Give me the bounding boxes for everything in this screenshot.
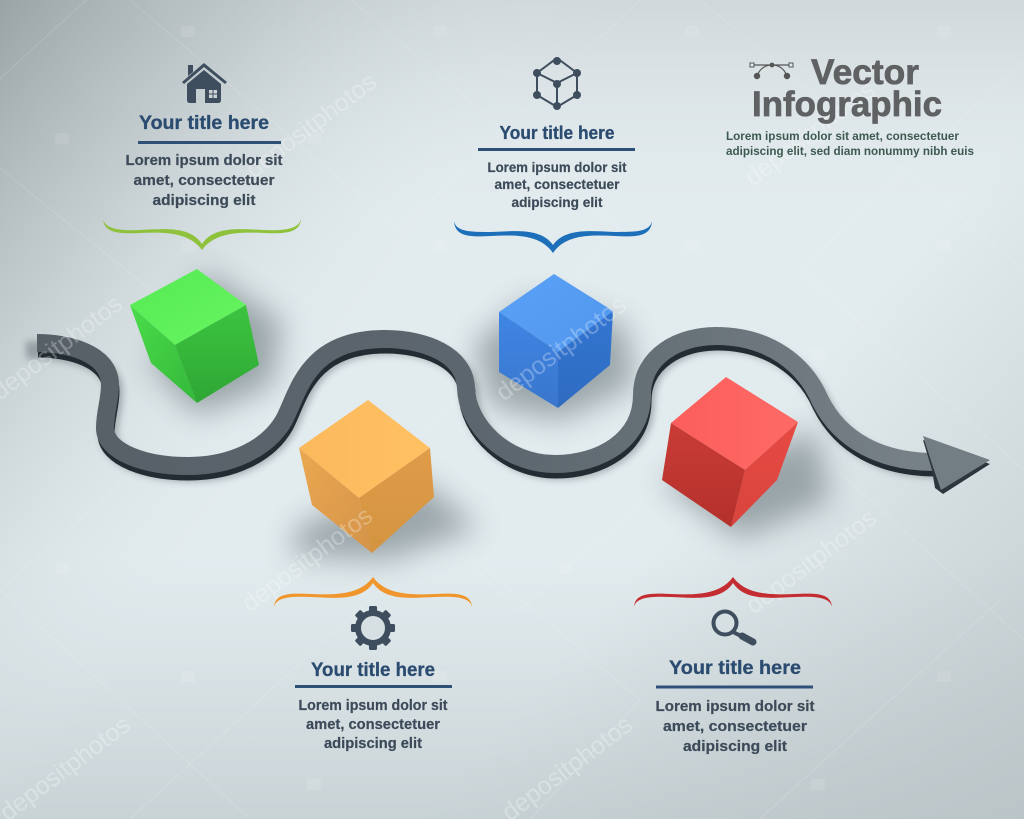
subheading: Lorem ipsum dolor sit amet, consectetuer (726, 129, 959, 143)
text block: adipiscing elit (512, 195, 603, 210)
cube: green (130, 269, 259, 403)
heading: Infographic (752, 85, 942, 124)
watermark text: depositphotos (491, 291, 632, 407)
text block: Lorem ipsum dolor sit (488, 160, 627, 175)
text block: amet, consectetuer (663, 719, 807, 735)
text block (656, 699, 815, 755)
text block (298, 698, 448, 752)
brace: blue (454, 221, 652, 253)
watermark text: depositphotos (741, 504, 882, 620)
watermark text: depositphotos (237, 502, 378, 618)
rule (656, 686, 813, 688)
icon: magnifier (714, 612, 753, 642)
text block (126, 153, 283, 209)
cube: orange (299, 400, 434, 553)
title: Your title here (139, 112, 269, 134)
text block: Lorem ipsum dolor sit (298, 698, 448, 714)
panel: step four (634, 577, 832, 755)
heading: Vector (811, 53, 919, 92)
heading (752, 53, 942, 124)
text block: Lorem ipsum dolor sit (126, 153, 283, 169)
panel: step three (274, 577, 472, 752)
icon: gear (351, 606, 395, 650)
brace: orange (274, 577, 472, 607)
title: Your title here (500, 123, 614, 143)
title: Your title here (311, 659, 435, 681)
brace: red (634, 577, 832, 607)
text block: amet, consectetuer (306, 717, 440, 733)
cube: red (662, 377, 798, 527)
title: Your title here (669, 657, 801, 679)
track shadow (26, 343, 939, 473)
text block: Lorem ipsum dolor sit (656, 699, 815, 715)
watermark text: depositphotos (740, 76, 881, 192)
subheading (726, 129, 974, 158)
cube: blue (499, 274, 613, 408)
arrowhead (923, 436, 990, 490)
watermark text (0, 68, 882, 819)
rule (138, 141, 281, 144)
watermark text: depositphotos (241, 68, 382, 184)
text block: adipiscing elit (152, 193, 256, 209)
icon: molecule cube (533, 57, 581, 110)
panel: step one (103, 63, 301, 250)
text block (488, 160, 627, 210)
text block: amet, consectetuer (134, 173, 275, 189)
track top surface (37, 336, 935, 466)
rule (295, 685, 452, 688)
text block: amet, consectetuer (494, 177, 620, 192)
panel: step two (454, 57, 652, 253)
brace: green (103, 219, 301, 250)
text block: adipiscing elit (683, 739, 787, 755)
winding arrow track (26, 336, 990, 494)
cube shadows (152, 272, 830, 560)
icon: bezier curve (750, 63, 793, 79)
text block: adipiscing elit (324, 736, 422, 752)
arrowhead side (923, 440, 990, 494)
rule (478, 148, 635, 151)
track side (38, 342, 936, 472)
icon: house (182, 63, 227, 103)
header block (726, 53, 974, 158)
subheading: adipiscing elit, sed diam nonummy nibh euis (726, 144, 974, 158)
